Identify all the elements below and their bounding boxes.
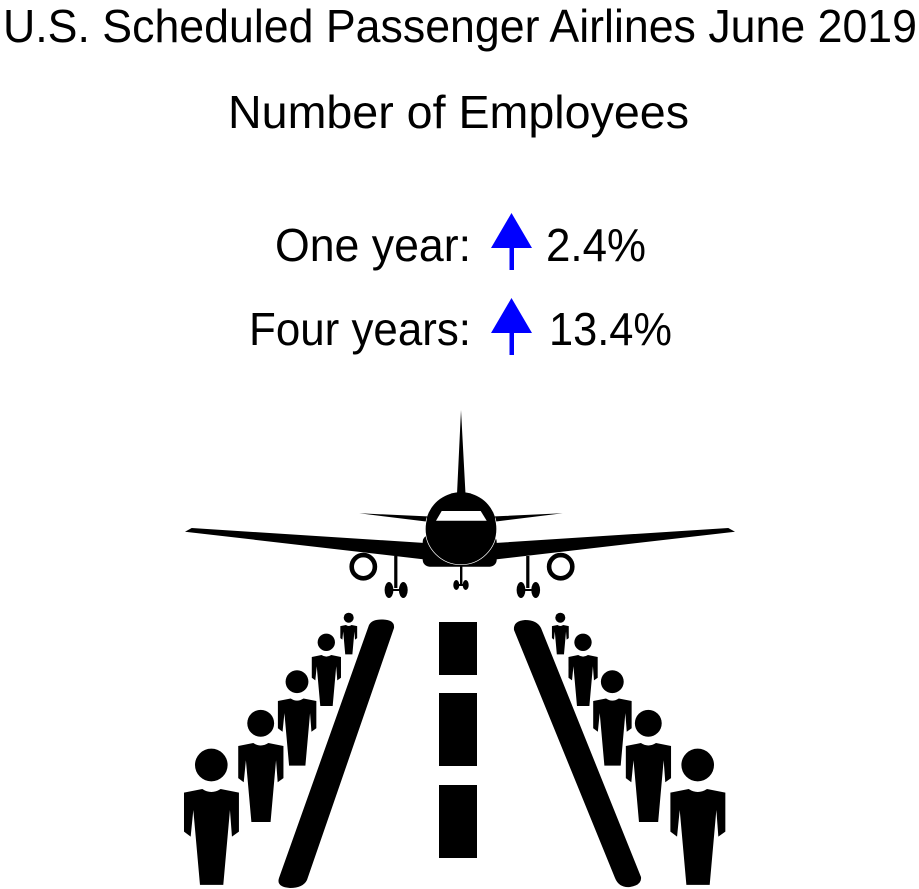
people left side [184,613,357,885]
runway left edge line [278,619,394,888]
icon: airplane front view [185,410,735,598]
runway center dashes [439,622,477,858]
icon: up arrow four years [491,298,532,355]
icon: up arrow one year [491,213,532,270]
title: U.S. Scheduled Passenger Airlines June 2019 [3,0,917,52]
subtitle: Number of Employees [228,86,689,138]
one year statistic [275,213,646,271]
people right side [552,613,725,885]
four years statistic: Four years: [249,303,471,355]
runway right edge line [514,620,641,887]
one year statistic: 2.4% [546,219,646,271]
one year statistic: One year: [275,219,471,271]
four years statistic: 13.4% [549,303,672,355]
four years statistic [249,298,672,355]
